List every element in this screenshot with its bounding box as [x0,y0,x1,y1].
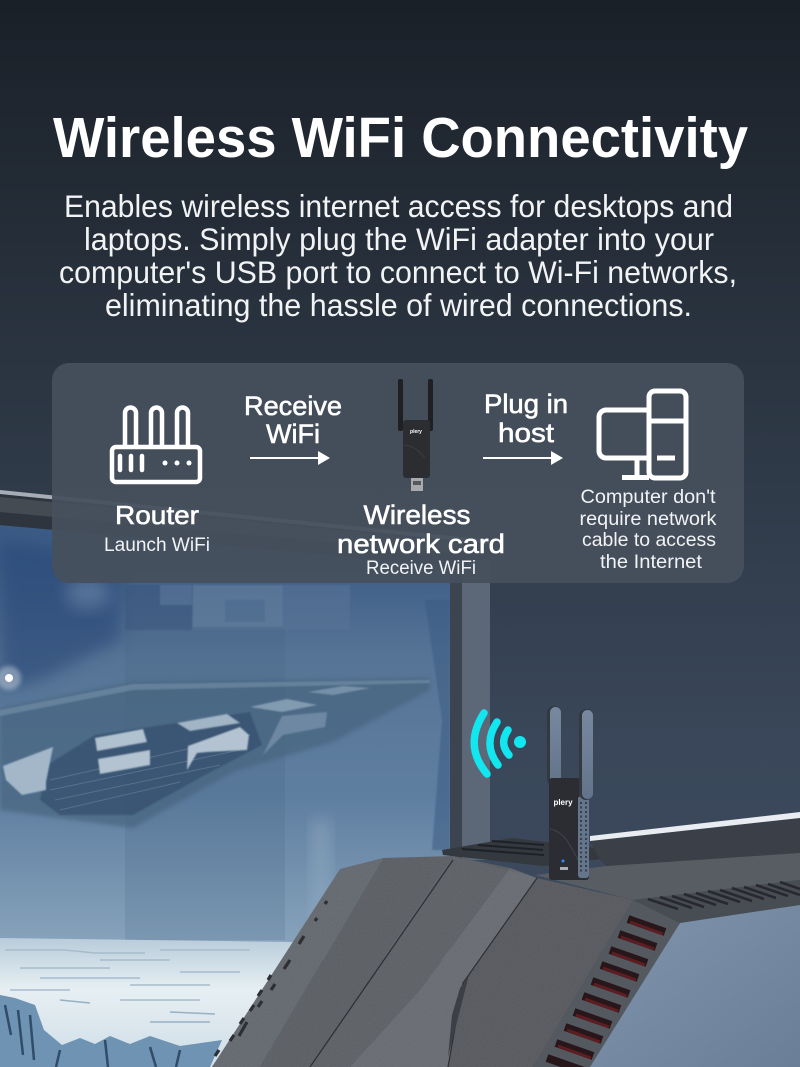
label: plug in host: host [498,418,555,448]
description: eliminating the hassle of wired connections. [105,287,692,323]
description [59,188,737,323]
adapter brand: plery [553,798,573,807]
label: plug in host: Plug in [484,389,568,419]
label: wireless network card: network card [337,529,505,559]
case left strip [212,858,383,1067]
title: Wireless WiFi Connectivity [53,106,748,170]
label: computer note: the Internet [600,551,703,573]
label: launch wifi: Launch WiFi [104,535,210,556]
monitor top bezel [0,490,490,572]
panel background [52,363,744,583]
label: wireless network card: Wireless [364,500,470,530]
monitor screen: spaceship over ice [0,520,450,960]
label: plug in host [484,389,568,448]
panel: diagram [52,363,744,583]
computer case [212,812,800,1067]
large WiFi adapter [547,706,593,880]
icon: small WiFi adapter: plery [410,429,422,435]
right side panel [590,905,800,1067]
description: computer's USB port to connect to Wi-Fi networks, [59,254,737,290]
icon: small WiFi adapter [398,379,433,491]
label: receive wifi: WiFi [266,419,320,449]
case white rim and interior [590,818,800,867]
label: computer note: Computer don't [580,486,716,508]
star glow [0,666,21,690]
arrow: adapter to computer [483,451,563,465]
case textured facet [260,856,453,1067]
case grain [212,856,633,1067]
adapter LED [562,860,564,862]
antenna left [547,706,561,786]
adapter mesh side [578,796,589,878]
icon: wifi signal [474,713,526,774]
label: receive wifi [244,391,342,449]
case left ports [215,901,327,1056]
ice field [0,938,295,1067]
case top surface [535,853,800,900]
description: laptops. Simply plug the WiFi adapter into your [84,221,714,257]
icon: router [112,408,200,482]
monitor right bezel [450,560,462,860]
monitor stand [442,838,612,866]
label: computer note: require network [580,508,717,530]
label: computer note: cable to access [582,529,716,551]
label: receive wifi sub: Receive WiFi [366,558,476,579]
antenna right [579,709,593,800]
monitor [0,490,490,1067]
label: computer note [580,486,717,573]
red side vent [533,900,680,1067]
description: Enables wireless internet access for desktops and [64,188,733,224]
label: receive wifi: Receive [244,391,342,421]
case front facet [448,878,633,1067]
label: wireless network card [337,500,505,559]
adapter body [549,778,589,880]
case light band [350,868,537,1067]
label: router: Router [115,500,199,530]
icon: computer [599,391,686,478]
arrow: router to adapter [250,451,330,465]
top vent [633,880,800,923]
